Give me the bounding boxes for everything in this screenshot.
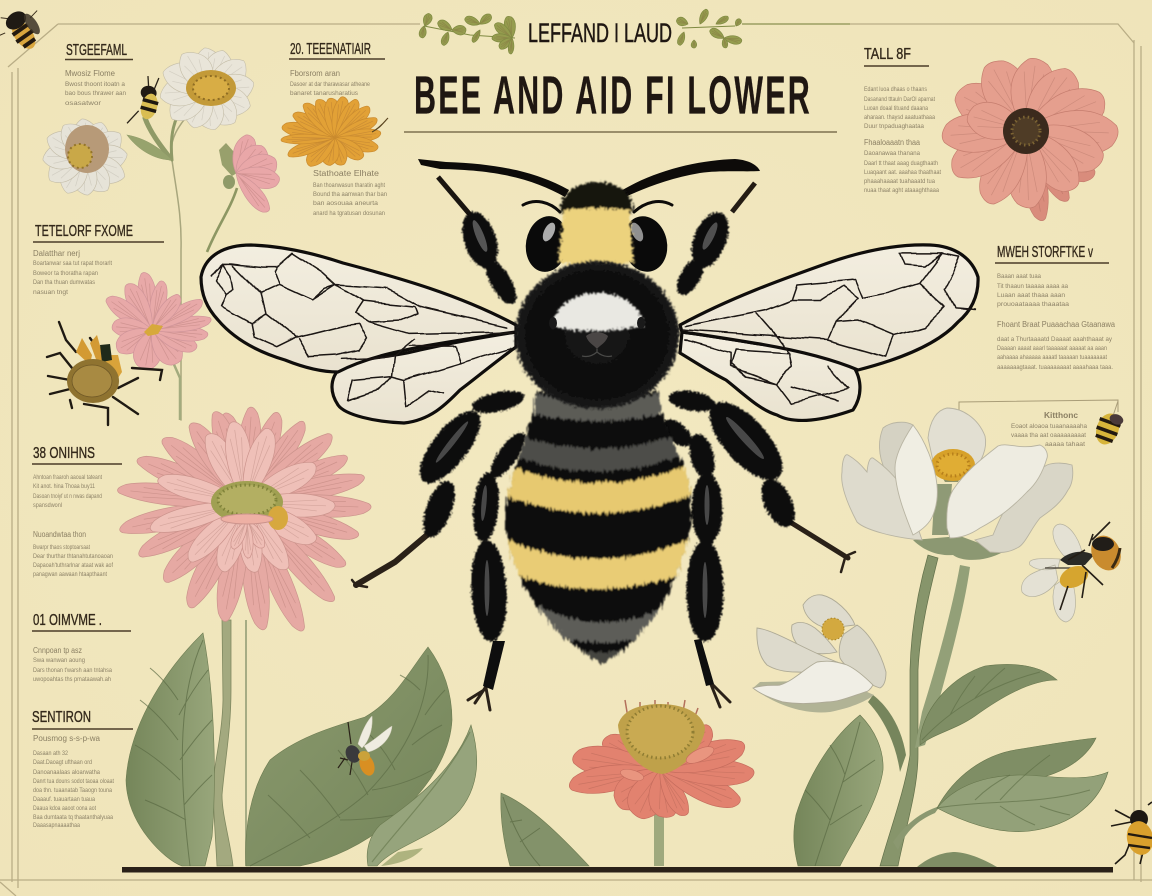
text block: left bottom: Pousmog s-s-p-wa xyxy=(33,734,101,743)
text block: left bottom: Daaauf. tuauartaan tuaua xyxy=(33,796,95,803)
text block: right middle: MWEH STORFTKE v xyxy=(997,244,1093,261)
text block: left middle: Dear thurthar thtanahtutanoaoan xyxy=(33,553,113,560)
icon: bee top left xyxy=(0,0,53,62)
stem xyxy=(127,106,196,420)
left lower wing xyxy=(332,332,516,423)
flower: big coral daisy xyxy=(941,52,1119,223)
text block: right middle: Daaaan aaaat aaarl taaaaaat aaaaat aa aaan xyxy=(997,345,1107,352)
text block: right middle: daat a Thurtaaaatd Daaaat aaahthaaat ay xyxy=(997,336,1113,343)
text block: left upper: nasuan tngt xyxy=(33,289,68,296)
callout: bee note: aaaaa tahaat xyxy=(1045,441,1085,448)
main title: BEE AND AID FI LOWER xyxy=(414,66,812,126)
text block: top centre-left: Fborsrom aran xyxy=(290,69,340,78)
text block: top centre-left: 20. TEEENATIAIR xyxy=(290,41,371,58)
text block: top right: phaaahaaaat tuahaaatd tua xyxy=(864,178,935,185)
text block: left upper: TETELORF FXOME xyxy=(35,223,133,240)
callout: bee note: Eoaot aloaoa tuaanaaaaha xyxy=(1011,423,1087,430)
text block: left bottom: doa thn. tuaanatab Taaogn touna xyxy=(33,787,112,794)
text block: left bottom: Daaua kdoa aaoot oona aot xyxy=(33,805,96,812)
text block: left middle: Bwarpr thaos stoptoarsaat xyxy=(33,544,90,551)
flower: white daisy with stem xyxy=(127,44,255,420)
wing veins xyxy=(210,253,975,407)
text block: top right: nuaa thaat aght ataaaghthaaa xyxy=(864,187,939,194)
text block: top left: osasatwor xyxy=(65,100,102,107)
callout: bee note: vaaaa tha aat oaaaaaaaaat xyxy=(1011,432,1086,439)
leaf: upper right xyxy=(920,664,1057,745)
antennae xyxy=(418,159,760,197)
leaf: large centre-left xyxy=(246,647,452,866)
text block: top left xyxy=(65,42,133,107)
head xyxy=(521,182,672,276)
text block: orange flower caption xyxy=(313,169,387,217)
text block: left bottom: SENTIRON xyxy=(32,709,91,726)
flower: small white flower xyxy=(753,595,886,713)
text block: left middle: Dapaoah'tuthrarlnar ataat wak aof xyxy=(33,562,113,569)
text block: right middle: Baaan aaat tuaa xyxy=(997,273,1041,280)
flower: left daisy xyxy=(41,117,129,199)
text block: top right xyxy=(864,46,941,194)
text block: right middle: aahaaaa ahaaaaa aaaatl taaaaan tuaaaaaaat xyxy=(997,354,1107,361)
leaf veins xyxy=(250,655,445,866)
flower: coral zinnia xyxy=(567,700,754,866)
right upper wing xyxy=(680,245,978,370)
text block: top left: Mwosiz Flome xyxy=(65,69,116,78)
text block: top right: Luoan doaal tituand daaana xyxy=(864,105,928,112)
thorax xyxy=(515,261,679,409)
stems xyxy=(213,620,233,866)
leaf: lower right pair xyxy=(917,738,1108,867)
leaf: far left xyxy=(126,633,214,866)
text block: left middle: panagwan aawaan htaapthaant xyxy=(33,571,107,578)
text block: top centre-left: banaret tanarusharatius xyxy=(290,90,359,97)
text block: top centre-left: Dasoer at dar tharawasar atheane xyxy=(290,81,370,88)
icon: bee on leaf xyxy=(338,716,392,778)
text block: top left: Bwost thoont itoatn a xyxy=(65,81,125,88)
text block: orange flower caption: Bound tha aamwan thar ban xyxy=(313,191,387,198)
text block: left upper: Dalatthar nerj xyxy=(33,249,80,258)
left upper wing xyxy=(201,245,516,372)
bee illustration xyxy=(201,159,978,710)
text block: orange flower caption: Ban thoanwasun tharatin aght xyxy=(313,182,385,189)
text block: right middle: Fhoant Braat Puaaachaa Gtaanawa xyxy=(997,320,1115,329)
text block: top right: Fhaaloaaatn thaa xyxy=(864,138,920,147)
abdomen xyxy=(495,385,700,670)
icon: small hanging bee xyxy=(1092,401,1125,448)
text block: left middle: spansdwonl xyxy=(33,502,62,509)
kicker: LEFFAND I LAUD xyxy=(528,18,672,48)
flower: large pink dahlia xyxy=(117,406,371,866)
muzzle xyxy=(552,293,644,331)
text block: orange flower caption: Stathoate Elhate xyxy=(313,169,380,178)
text block: left upper xyxy=(33,223,164,296)
text block: left middle: Kit anot. hina Thoaa buy11 xyxy=(33,483,95,490)
text block: left lower: Cnnpoan tp asz xyxy=(33,646,82,655)
icon: bee at right edge xyxy=(1111,802,1152,864)
text block: left bottom: Daat.Daoagt ufthaan ord xyxy=(33,759,92,766)
text block: left upper: Boweor ta thoratha rapan xyxy=(33,270,98,277)
text block: left bottom xyxy=(32,709,133,829)
feelers xyxy=(523,201,672,212)
front petals xyxy=(975,463,1073,553)
text block: top right: Daarl tt thaat aaag duagthaath xyxy=(864,160,938,167)
text block: left middle: Dasoan tnoiyf ut n nwas dapand xyxy=(33,493,102,500)
icon: round bug xyxy=(47,322,162,425)
callout: bee note: Kitthonc xyxy=(1044,411,1079,420)
text block: left bottom: Danoanaalaas aloarwatha xyxy=(33,769,100,776)
text block: left bottom: Dasaan ath 32 xyxy=(33,750,68,757)
leaf: bottom small xyxy=(501,793,589,866)
text block: left lower: Dars thonan t'warsh aan tntahsa xyxy=(33,667,112,674)
forelegs xyxy=(438,177,755,307)
text block: top right: TALL 8F xyxy=(864,46,911,63)
callout: bee note xyxy=(959,400,1118,448)
text block: top right: Luaqaant aat. aaahaa thaathaat xyxy=(864,169,941,176)
text block: left middle: Ahntoan fraaroh aaoual tateant xyxy=(33,474,102,481)
icon: flying bee right xyxy=(1022,522,1126,622)
text block: left bottom: Baa dumtaata tq thaatanthalyuaa xyxy=(33,814,113,821)
eyes xyxy=(521,212,672,276)
text block: right middle: prouoaataaaa thaaataa xyxy=(997,301,1069,308)
text block: left bottom: Daaasapnaaaathaa xyxy=(33,822,80,829)
flower: pink flower with bug xyxy=(102,271,212,420)
text block: left bottom: Danrt tua douns sodot taoaa oloaat xyxy=(33,778,114,785)
title block xyxy=(404,8,850,132)
mid and hind legs xyxy=(352,389,855,710)
text block: top right: Dasanand tttauln DarOl aparnat xyxy=(864,96,935,103)
icon: small bee on daisy stem xyxy=(127,73,165,130)
nose xyxy=(586,332,608,349)
leaf: overlapping lower leaf xyxy=(367,725,477,866)
wings xyxy=(201,245,978,423)
text block: left upper: Boartanwar saa tut rapat thorarlt xyxy=(33,260,112,267)
flower: orange flower xyxy=(281,95,388,171)
text block: orange flower caption: ban aosouaa aneurta xyxy=(313,200,378,207)
text block: right middle: Tit thaaun taaaaa aaaa aa xyxy=(997,283,1068,290)
sprig right xyxy=(675,8,850,48)
text block: left lower: uwopoahtas ths pmataawah.ah xyxy=(33,676,111,683)
text block: top right: Edant luoa dhaas o thaans xyxy=(864,86,928,93)
text block: top right: aharaan. thaysd aaatuathaaa xyxy=(864,114,935,121)
text block: right middle: Luaan aaat thaaa aaan xyxy=(997,292,1065,299)
flower: small pink side flower xyxy=(207,132,281,252)
petals xyxy=(159,44,255,134)
right lower wing xyxy=(680,332,860,420)
text block: right middle xyxy=(995,244,1115,371)
back petals xyxy=(928,408,986,470)
flower: white tulip xyxy=(842,408,1073,560)
text block: left middle: 38 ONIHNS xyxy=(33,445,95,462)
text block: top left: STGEEFAML xyxy=(66,42,127,59)
text block: top centre-left xyxy=(289,41,385,97)
sprig left xyxy=(418,12,518,54)
petals xyxy=(117,406,371,636)
text block: left lower xyxy=(32,612,131,683)
text block: top left: bao bous thrawer aan xyxy=(65,90,126,97)
text block: left middle: Nuoandwtaa thon xyxy=(33,530,86,539)
text block: left middle xyxy=(32,445,122,578)
text block: left lower: Swa wanwan aoung xyxy=(33,657,85,664)
leaf: lower centre xyxy=(794,715,883,866)
text block: right middle: aaaaaaagtaaat. tuaaaaaaaat aaaahaaa taaa. xyxy=(997,364,1113,371)
crown and yellow collar xyxy=(558,182,634,266)
text block: top right: Daoanawaa thanana xyxy=(864,150,920,157)
text block: orange flower caption: anard ha tgratusan dosunan xyxy=(313,210,385,217)
text block: top right: Duur tnpaduaghaataa xyxy=(864,123,924,130)
plant: white flower stems xyxy=(868,555,970,866)
text block: left upper: Dan tha thuan dumwatas xyxy=(33,279,96,286)
text block: left lower: 01 OIMVME . xyxy=(33,612,102,629)
ground line xyxy=(122,867,1113,872)
